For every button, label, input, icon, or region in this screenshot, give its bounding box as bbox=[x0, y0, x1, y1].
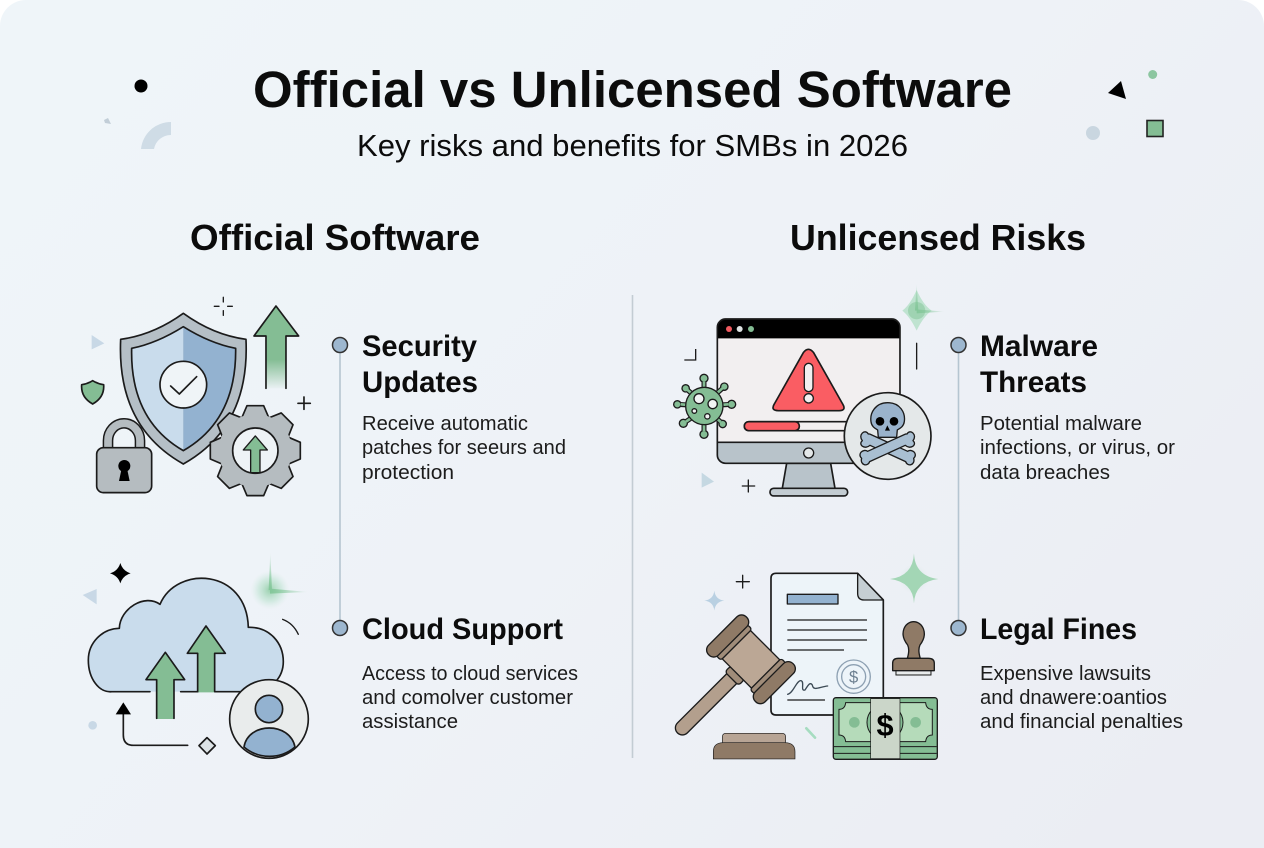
vertical tick bbox=[915, 343, 919, 369]
user avatar bbox=[230, 680, 308, 758]
light triangle bbox=[702, 473, 714, 488]
large shield bbox=[120, 313, 246, 464]
subtitle: Key risks and benefits for SMBs in 2026 bbox=[357, 128, 908, 163]
green sparkle bbox=[890, 553, 938, 603]
decoration: top left shapes bbox=[104, 80, 171, 149]
heading: unlicensed risks: Unlicensed Risks bbox=[790, 217, 1086, 258]
item heading: Threats bbox=[980, 366, 1087, 399]
panel: official software bbox=[82, 217, 578, 758]
item: cloud support bbox=[362, 613, 578, 733]
item description: assistance bbox=[362, 711, 458, 733]
item description: Potential malware bbox=[980, 413, 1142, 435]
item description: Access to cloud services bbox=[362, 663, 578, 685]
item: malware threats bbox=[980, 330, 1175, 484]
item description: data breaches bbox=[980, 462, 1110, 484]
item heading: Legal Fines bbox=[980, 613, 1137, 646]
decorative small triangle bbox=[92, 335, 104, 349]
gear bbox=[210, 406, 300, 496]
heading: official software: Official Software bbox=[190, 217, 480, 258]
arc mark bbox=[283, 619, 298, 634]
central divider bbox=[632, 295, 634, 758]
item description: protection bbox=[362, 462, 454, 484]
warning triangle bbox=[773, 349, 844, 411]
corner mark bbox=[684, 349, 696, 360]
skull and crossbones badge bbox=[844, 393, 931, 479]
item description: Receive automatic bbox=[362, 413, 528, 435]
padlock bbox=[97, 423, 152, 493]
gavel bbox=[649, 612, 798, 761]
small pill bbox=[806, 728, 815, 738]
icon: cloud with arrows and user bbox=[83, 552, 309, 758]
icon: shield, lock and gear bbox=[82, 297, 310, 496]
item heading: Updates bbox=[362, 366, 478, 399]
cloud bbox=[88, 578, 283, 692]
item description: infections, or virus, or bbox=[980, 437, 1175, 459]
monitor body bbox=[717, 319, 900, 463]
item description: Expensive lawsuits bbox=[980, 663, 1151, 685]
green glow sparkle bbox=[902, 283, 945, 331]
item: security updates bbox=[362, 330, 566, 484]
diamond bbox=[199, 738, 215, 754]
item description: and financial penalties bbox=[980, 711, 1183, 733]
plus bbox=[298, 397, 310, 409]
black star bbox=[110, 563, 131, 583]
icon: monitor with warning, virus and skull bbox=[674, 283, 945, 496]
item description: patches for seeurs and bbox=[362, 437, 566, 459]
sparkle cross bbox=[214, 297, 232, 315]
decoration: top right shapes bbox=[1086, 70, 1163, 140]
title: Official vs Unlicensed Software bbox=[253, 61, 1012, 118]
blue sparkle bbox=[704, 591, 724, 611]
cloud arrows bbox=[146, 626, 225, 719]
document bbox=[771, 573, 883, 715]
panel: unlicensed risks bbox=[649, 217, 1183, 761]
light triangle bbox=[83, 589, 97, 604]
timeline: unlicensed bbox=[951, 338, 966, 636]
small green shield bbox=[82, 381, 104, 404]
light dot bbox=[88, 721, 97, 730]
money stack: $ bbox=[876, 709, 894, 743]
plus bbox=[736, 575, 749, 588]
monitor stand bbox=[770, 463, 848, 496]
plus bbox=[742, 480, 755, 492]
timeline: official bbox=[332, 338, 348, 636]
item: legal fines bbox=[980, 613, 1183, 733]
icon: gavel, document and money bbox=[649, 553, 938, 761]
virus bbox=[674, 374, 736, 438]
item heading: Malware bbox=[980, 330, 1098, 363]
item description: and dnawere:oantios bbox=[980, 687, 1167, 709]
item heading: Cloud Support bbox=[362, 613, 563, 646]
money stack bbox=[833, 698, 937, 759]
return arrow bbox=[116, 702, 188, 745]
document: $ bbox=[849, 668, 858, 687]
item heading: Security bbox=[362, 330, 477, 363]
green glow sparkle bbox=[251, 552, 309, 609]
progress bar bbox=[744, 422, 854, 431]
item description: and comolver customer bbox=[362, 687, 573, 709]
stamp bbox=[893, 622, 934, 675]
green up arrow bbox=[254, 306, 299, 388]
